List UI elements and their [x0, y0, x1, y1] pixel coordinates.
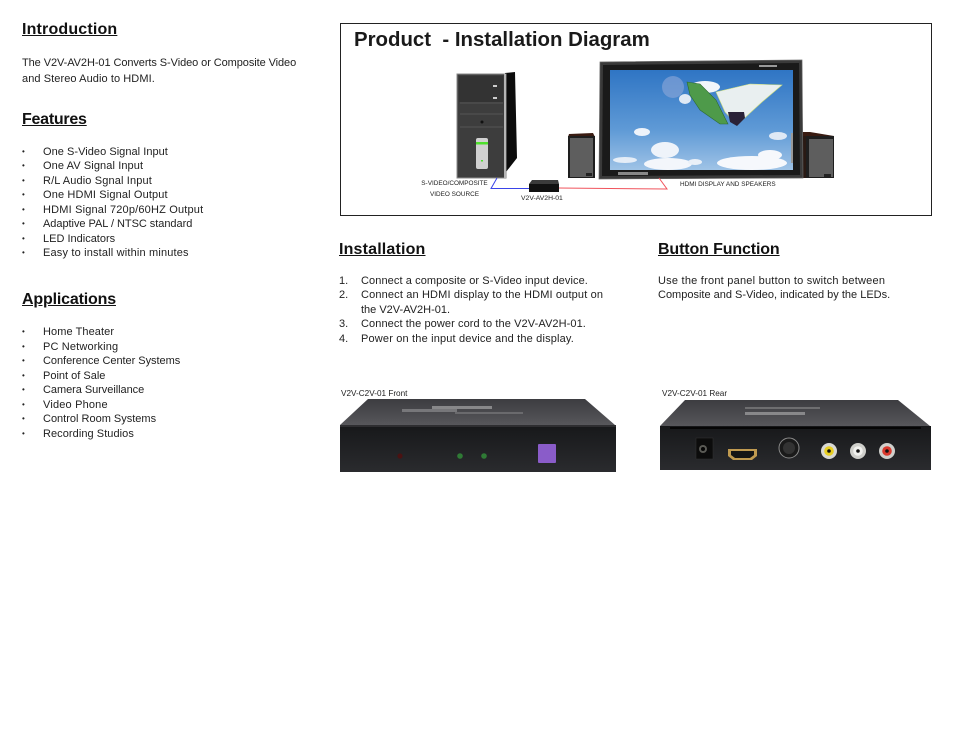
list: installation steps [339, 274, 603, 344]
label: video source: VIDEO SOURCE [430, 190, 479, 198]
arrow: blue source cable [491, 178, 530, 188]
list: installation steps: Connect the power cord to the V2V-AV2H-01. [361, 318, 586, 330]
caption: front: V2V-C2V-01 Front [341, 389, 407, 398]
caption: rear: V2V-C2V-01 Rear [662, 389, 727, 398]
text: introduction body [22, 57, 296, 85]
icon: right speaker [798, 132, 834, 178]
list: applications: Camera Surveillance [43, 384, 144, 396]
list: applications: Home Theater [43, 326, 114, 338]
label: display and speakers: HDMI DISPLAY AND SPEAKERS [680, 181, 776, 188]
list: features: One AV Signal Input [43, 160, 143, 172]
list: features: One HDMI Signal Output [43, 189, 168, 201]
list: applications: PC Networking [43, 340, 118, 352]
list: features [22, 146, 204, 259]
list: installation steps: 4. [339, 332, 348, 344]
list: installation steps: Connect a composite or S-Video input device. [361, 274, 588, 286]
list: features: LED Indicators [43, 232, 115, 244]
list: applications [22, 326, 180, 440]
list: applications: Video Phone [43, 398, 108, 410]
list: installation steps: 2. [339, 289, 348, 301]
heading: installation: Installation [339, 241, 426, 258]
list: features: HDMI Signal 720p/60HZ Output [43, 204, 203, 216]
icon: V2V-AV2H-01 box [529, 180, 559, 192]
panel: installation diagram [340, 23, 932, 216]
list: features: Adaptive PAL / NTSC standard [43, 218, 192, 230]
heading: introduction: Introduction [22, 21, 117, 38]
arrow: red HDMI cable [558, 178, 667, 189]
list: features: One S-Video Signal Input [43, 146, 168, 158]
photo: rear of device [660, 400, 931, 470]
list: installation steps: Connect an HDMI display to the HDMI output on [361, 289, 603, 301]
list: features: Easy to install within minutes [43, 247, 189, 259]
list: installation steps: Power on the input device and the display. [361, 332, 574, 344]
icon: HDMI display [599, 60, 803, 179]
list: installation steps: 3. [339, 318, 348, 330]
list: applications: Control Room Systems [43, 413, 156, 425]
label: video source [421, 180, 488, 198]
list: applications: Point of Sale [43, 370, 105, 382]
photo: front of device [340, 399, 616, 472]
list: applications: Recording Studios [43, 428, 134, 440]
label: video source: S-VIDEO/COMPOSITE [421, 180, 488, 187]
heading: features: Features [22, 111, 87, 128]
heading: applications: Applications [22, 291, 116, 308]
icon: left speaker [568, 133, 595, 178]
title: product installation diagram: Product - Installation Diagram [354, 29, 650, 51]
list: applications: Conference Center Systems [43, 355, 180, 367]
list: installation steps: the V2V-AV2H-01. [361, 304, 450, 316]
text: button function body: Composite and S-Video, indicated by the LEDs. [658, 289, 890, 301]
text: button function body [658, 274, 890, 301]
text: introduction body: and Stereo Audio to HDMI. [22, 73, 155, 85]
icon: PC tower [457, 72, 517, 178]
list: installation steps: 1. [339, 274, 348, 286]
text: button function body: Use the front panel button to switch between [658, 274, 885, 286]
heading: button function: Button Function [658, 241, 780, 258]
label: V2V-AV2H-01: V2V-AV2H-01 [521, 195, 563, 202]
text: introduction body: The V2V-AV2H-01 Converts S-Video or Composite Video [22, 57, 296, 69]
list: features: R/L Audio Sgnal Input [43, 174, 152, 186]
